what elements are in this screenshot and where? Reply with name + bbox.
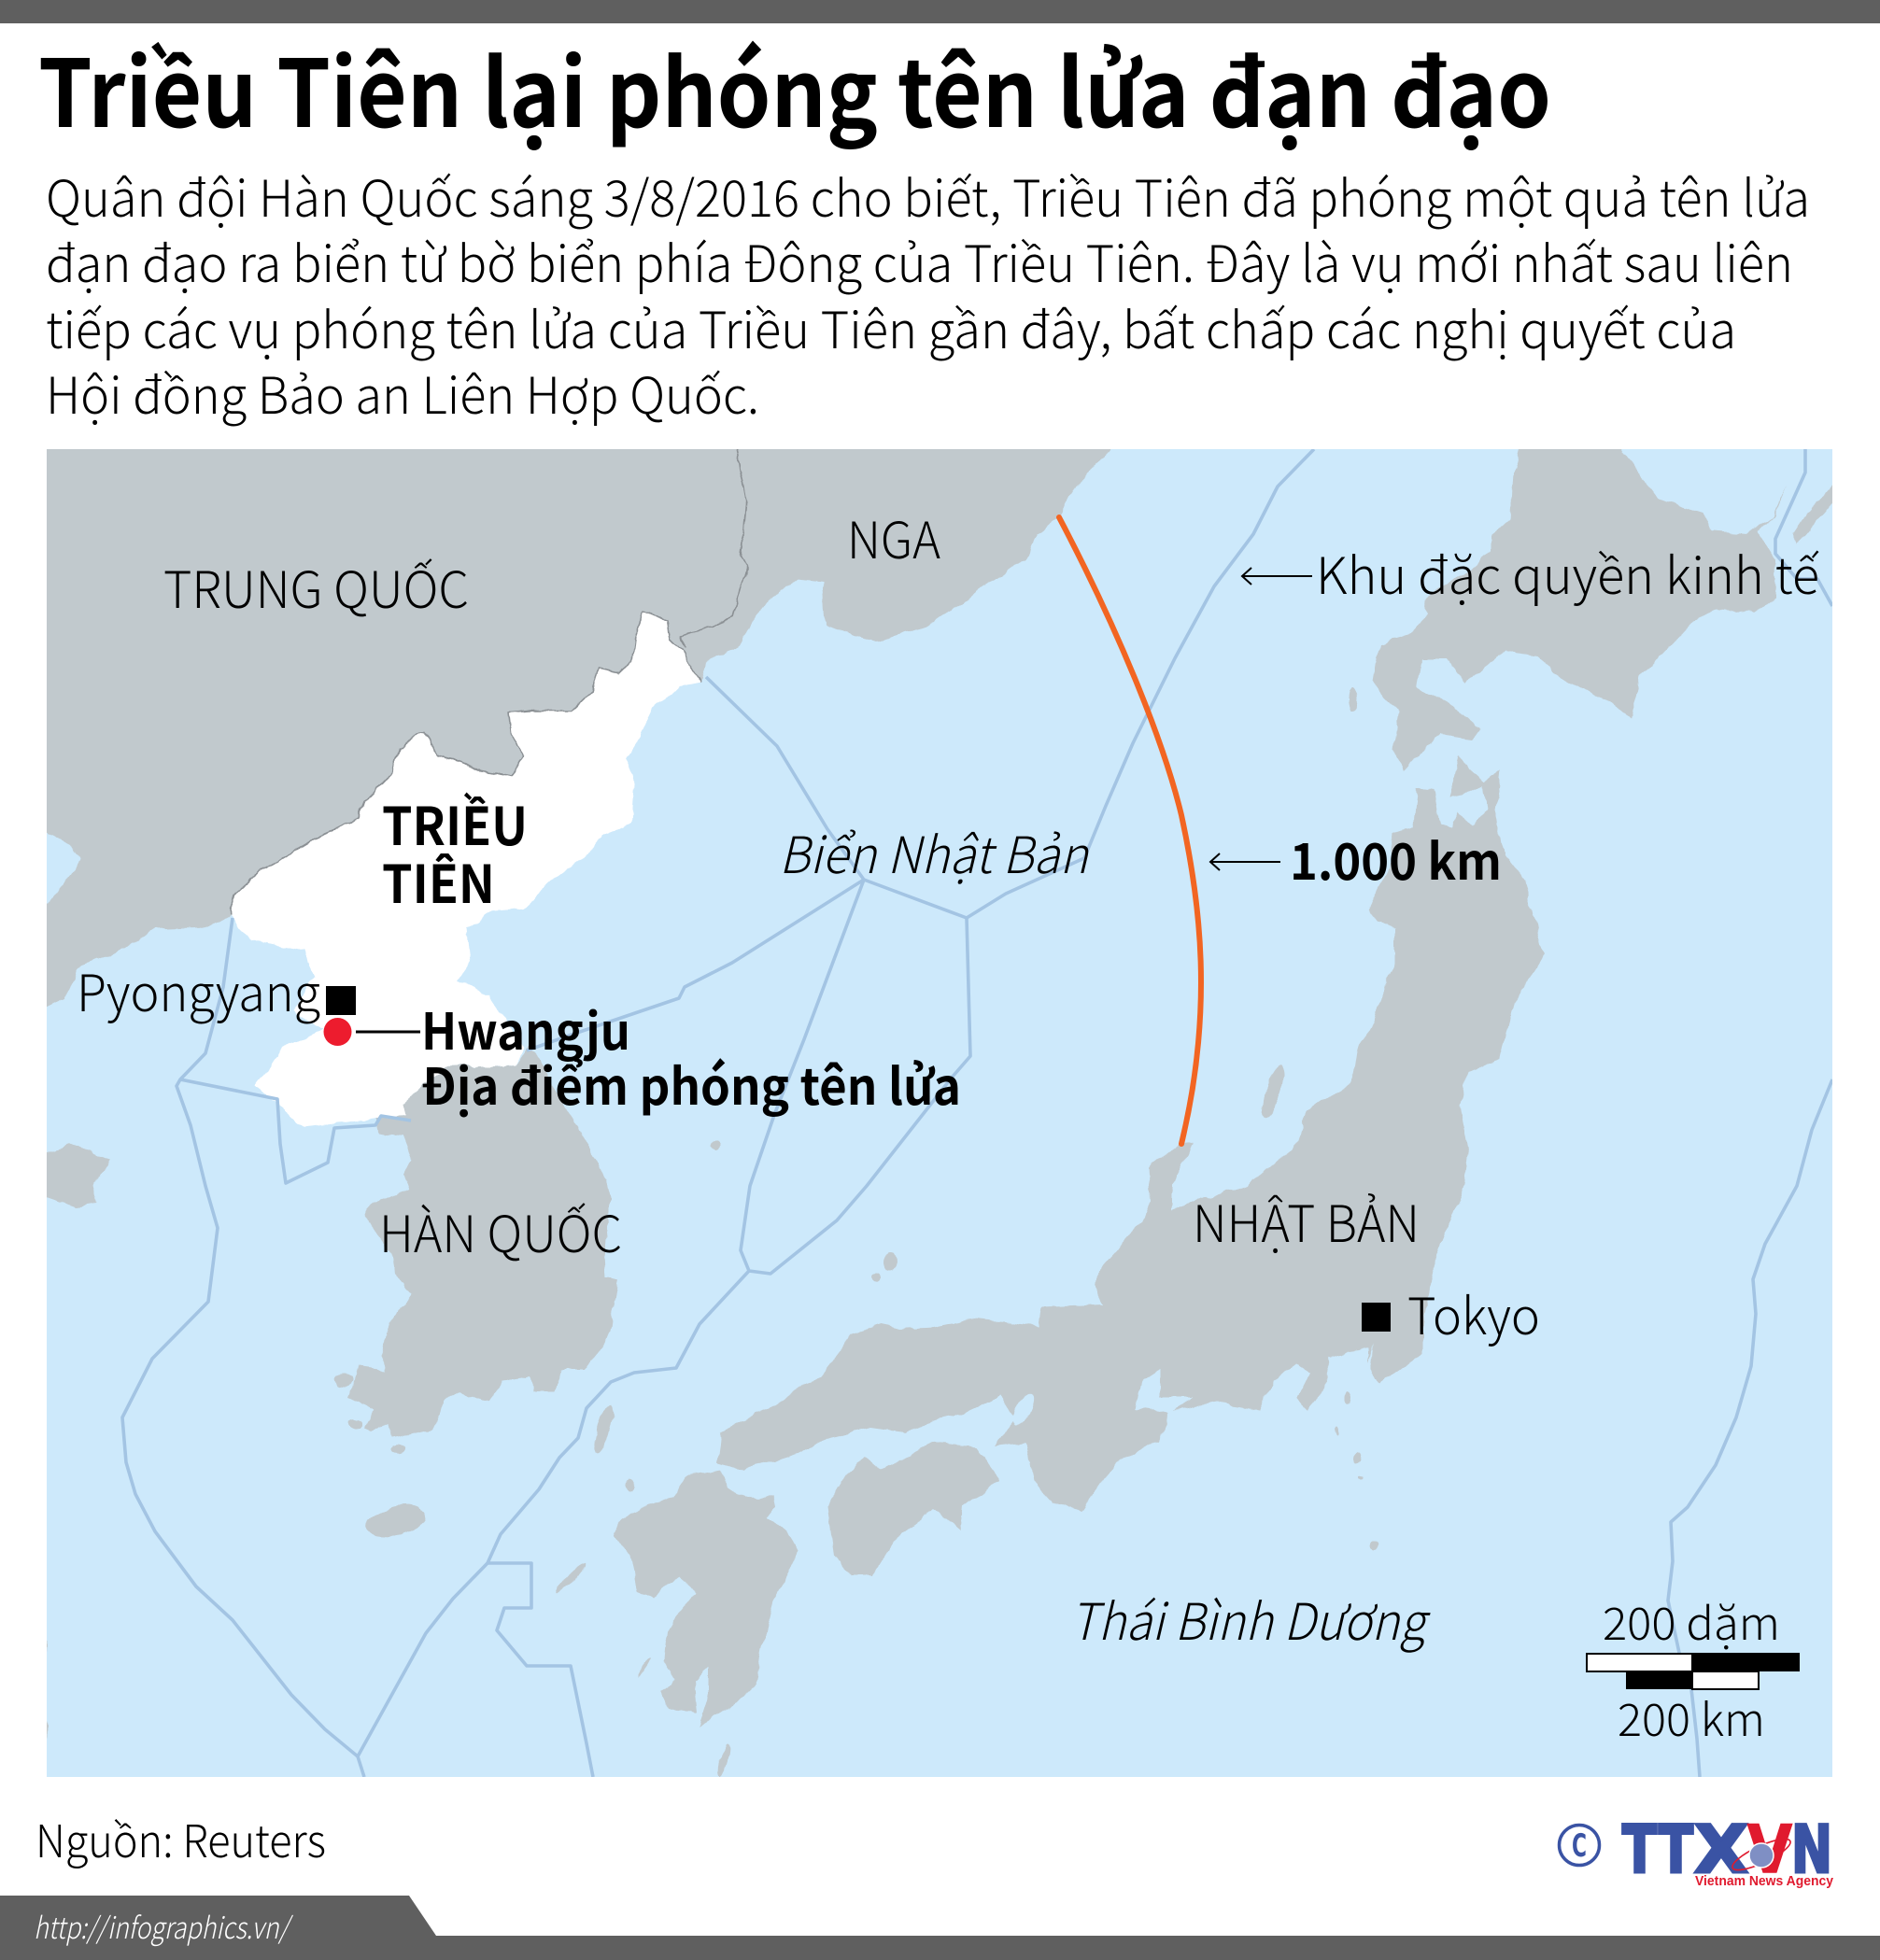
intro text block: tiếp các vụ phóng tên lửa của Triều Tiên gần đây, bất chấp các nghị quyết của bbox=[46, 289, 1736, 363]
South Korea bbox=[348, 1046, 619, 1438]
Lake Biwa bbox=[1012, 1393, 1035, 1426]
exclusive economic zone lines bbox=[122, 449, 1832, 1777]
label: Sea of Japan: Biển Nhật Bản bbox=[779, 814, 1090, 888]
Shikoku bbox=[827, 1443, 1000, 1576]
logo: TTXVN: T bbox=[1659, 1812, 1693, 1888]
Kyushu bbox=[614, 1470, 799, 1727]
label: Tokyo: Tokyo bbox=[1407, 1276, 1540, 1349]
source: Nguồn: Reuters bbox=[35, 1805, 326, 1870]
small islands bbox=[40, 686, 1379, 1777]
title: Triều Tiên lại phóng tên lửa đạn đạo bbox=[38, 19, 1551, 154]
arrow: 1000 km bbox=[1210, 853, 1280, 870]
marker: Pyongyang bbox=[326, 986, 356, 1015]
logo: TTXVN: T bbox=[1622, 1812, 1657, 1888]
label: Hwangju launch site: Địa điểm phóng tên lửa bbox=[421, 1046, 961, 1120]
China-Russia border bbox=[682, 439, 747, 648]
intro text block bbox=[46, 158, 1810, 429]
marker: Tokyo bbox=[1362, 1303, 1391, 1332]
label: North Korea: TRIỀU bbox=[382, 785, 528, 861]
scale bar: 200 dặm bbox=[1603, 1587, 1780, 1653]
label: Pacific Ocean: Thái Bình Dương bbox=[1070, 1581, 1431, 1655]
Shandong bbox=[28, 1144, 110, 1207]
label: Japan: NHẬT BẢN bbox=[1193, 1183, 1420, 1257]
sea background bbox=[47, 449, 1832, 1777]
label: Russia: NGA bbox=[847, 500, 940, 573]
missile trajectory arc bbox=[1059, 517, 1201, 1144]
arrow: exclusive economic zone bbox=[1242, 568, 1312, 585]
label: North Korea bbox=[382, 785, 528, 919]
Jeju bbox=[365, 1503, 426, 1537]
Hokkaido bbox=[1374, 439, 1788, 770]
label: Hwangju launch site bbox=[421, 991, 961, 1120]
intro text block: đạn đạo ra biển từ bờ biển phía Đông của Triều Tiên. Đây là vụ mới nhất sau liên bbox=[46, 223, 1793, 297]
intro text block: Hội đồng Bảo an Liên Hợp Quốc. bbox=[46, 355, 759, 429]
scale bar: 200 km bbox=[1618, 1684, 1765, 1749]
Tsushima bbox=[594, 1404, 615, 1453]
map panel bbox=[0, 411, 1840, 1777]
China-North Korea border bbox=[231, 613, 700, 915]
label: exclusive economic zone: Khu đặc quyền kinh tế bbox=[1316, 535, 1819, 609]
label: Pyongyang: Pyongyang bbox=[77, 952, 320, 1026]
North Korea bbox=[231, 613, 700, 1127]
label: South Korea: HÀN QUỐC bbox=[379, 1193, 622, 1267]
Honshu bbox=[717, 758, 1543, 1512]
logo: TTXVN bbox=[1560, 1812, 1833, 1889]
label: 1000 km: 1.000 km bbox=[1290, 821, 1502, 895]
logo: TTXVN: C bbox=[1572, 1827, 1587, 1865]
land masses bbox=[0, 411, 1840, 1777]
Kunashir bbox=[1793, 476, 1840, 543]
footer bar bbox=[0, 1896, 1880, 1960]
China and Russia bbox=[0, 411, 1121, 1018]
label: North Korea: TIÊN bbox=[382, 843, 495, 919]
label: Hwangju launch site: Hwangju bbox=[421, 991, 630, 1065]
logo: TTXVN: V bbox=[1747, 1812, 1792, 1888]
label: China: TRUNG QUỐC bbox=[163, 549, 469, 623]
intro text block: Quân đội Hàn Quốc sáng 3/8/2016 cho biết, Triều Tiên đã phóng một quả tên lửa bbox=[46, 158, 1810, 232]
logo: TTXVN: X bbox=[1694, 1812, 1748, 1888]
Bohai gulf bbox=[28, 822, 80, 920]
marker: Hwangju launch site bbox=[323, 1018, 420, 1046]
footer url: http://infographics.vn/ bbox=[34, 1905, 293, 1948]
logo: TTXVN: N bbox=[1791, 1812, 1832, 1888]
scale bar bbox=[1587, 1587, 1800, 1749]
logo: TTXVN: Vietnam News Agency bbox=[1695, 1874, 1833, 1889]
top bar bbox=[0, 0, 1880, 23]
